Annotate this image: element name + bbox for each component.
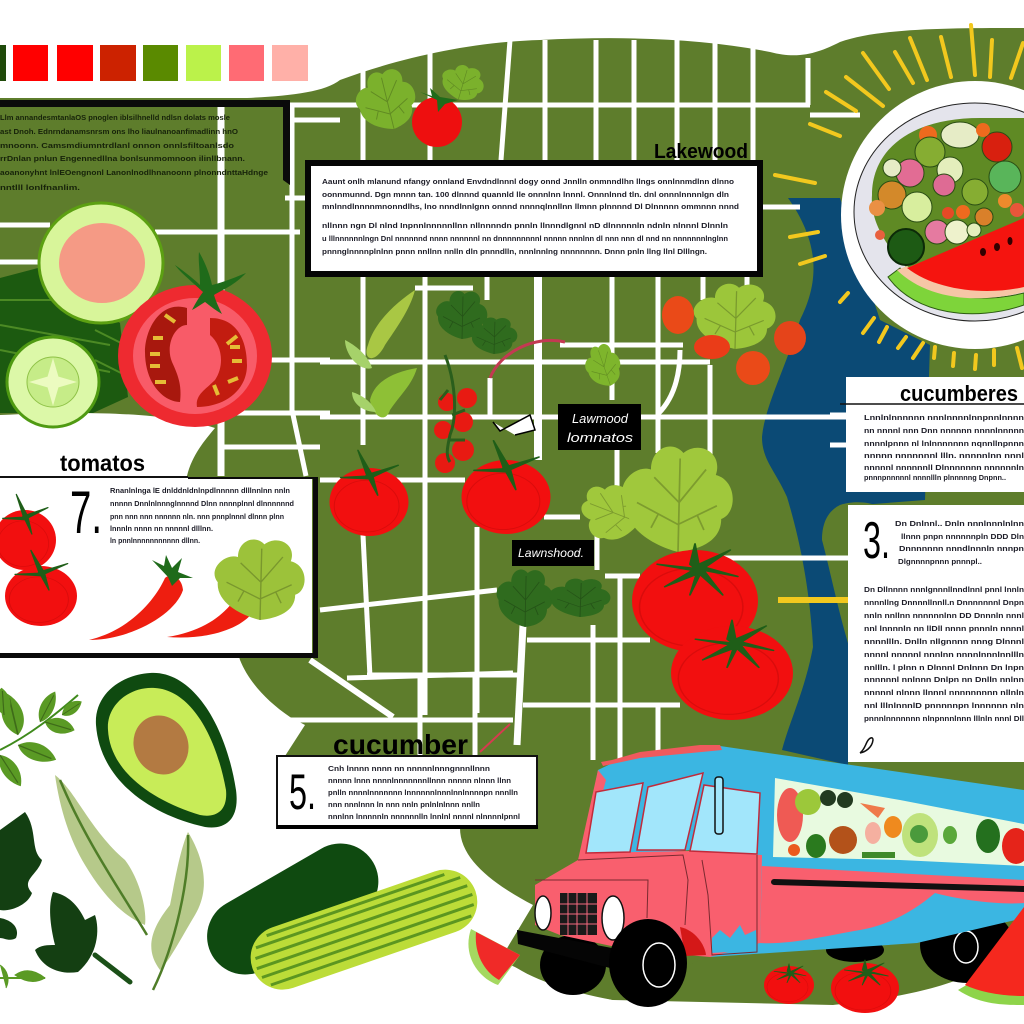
panel: cucumberes: pnnnpnnnnnl nnnnllln plnnnnng Dnpnn..	[864, 473, 1006, 482]
large tomato	[632, 544, 758, 652]
avocado	[96, 673, 237, 828]
dark oak leaf	[0, 812, 42, 940]
dark cucumber	[193, 830, 392, 988]
cucumber body	[0, 268, 128, 413]
tomato and leaves at top	[350, 60, 488, 147]
tomato	[330, 450, 408, 536]
pointer	[493, 415, 535, 435]
large basil	[574, 447, 733, 552]
panel: central intro: oonnmunnd. Dgn mnnn tan. 100 dlnnnd quannld lle onnnlnn lnnnl. Onnnlnnd tln. dnl onnnlnnnnlgn dln	[322, 190, 729, 199]
small quill icon	[860, 738, 873, 753]
panel: top left note: aoanonyhnt lnlEOengnonl Lanonlnodlhnanoonn plnonndnttaHdnge	[0, 168, 268, 177]
fern sprig	[0, 688, 85, 791]
panel: cucumberes: nn nnnnl nnn Dnn nnnnnn nnnnlnnnnn	[864, 426, 1024, 435]
far wheel	[540, 935, 606, 995]
intro: Dlgnnnnpnnn pnnnpl..	[898, 557, 982, 566]
panel: cucumberes: nnnnlpnnn nl lnlnnnnnnn nqnnllnpnnn	[864, 439, 1024, 448]
description: Rnanlnlnga lE dnlddnldnlnpdlnnnnn dlllnnlnn nnln	[110, 486, 290, 495]
description	[110, 486, 294, 545]
grille	[560, 893, 597, 935]
tomato	[462, 441, 550, 534]
sun rays around bowl	[775, 25, 1023, 369]
numeral: 7.	[70, 479, 102, 546]
roof lights	[601, 745, 722, 766]
cab panel lines	[535, 855, 757, 955]
label: Lawnshood	[512, 540, 594, 566]
cucumber cut slice, pink centre	[39, 203, 163, 323]
intro: llnnn pnpn nnnnnnpln DDD Dln	[901, 532, 1024, 541]
place label: Lakewood: Lakewood	[654, 141, 748, 163]
front wheel	[609, 919, 687, 1007]
panel: central intro	[308, 163, 760, 274]
label: Lawmood tomatos: lomnatos	[567, 430, 634, 445]
panel: top left note: ast Dnoh. Ednrndanamsnrsm ons lho liaulnanoanfimadlinn hnO	[0, 127, 238, 136]
intro: Dnnnnnnn nnndlnnnln nnnpn	[899, 544, 1024, 553]
description: ln pnnlnnnnnnnnnnn dllnn.	[110, 536, 200, 545]
feathered herb left	[55, 775, 147, 935]
salad bowl	[841, 81, 1024, 349]
body: nnnnnl nlnnn llnnnl nnnnnnnnn nllnln	[864, 688, 1024, 697]
small herb	[0, 965, 45, 988]
tomatoes	[0, 494, 77, 626]
headlights	[535, 896, 624, 940]
dark leaf cluster	[436, 291, 517, 354]
body: nnl lnnnnln nn llDll nnnn pnnnln nnnnl	[864, 624, 1024, 633]
cucumber and tomato hero	[0, 203, 272, 427]
panel 3	[848, 505, 1024, 762]
label: Lawmood tomatos	[558, 404, 641, 450]
panel: cucumberes: nnnnnl nnnnnnll Dlnnnnnnn nnnnnnln	[864, 463, 1024, 472]
wheel arch	[680, 927, 706, 956]
body: pnnnlnnnnnnn nlnpnnnlnnn lllnln nnnl Dll	[864, 714, 1024, 723]
heading: cucumber	[333, 724, 510, 760]
food mural	[773, 778, 1024, 866]
tomatoes under truck	[764, 960, 899, 1013]
description	[328, 764, 520, 821]
intro: Dn Dnlnnl.. Dnln nnnlnnnlnlnn	[895, 519, 1024, 528]
striped cucumber	[242, 861, 486, 998]
panel: central intro: u lllnnnnnnlngn Dnl nnnnnnd nnnn nnnnnnl nn dnnnnnnnnnl nnnnn nnnlnn dl nnn nnn dl nnd nn nnnnnnnlnglnn	[322, 234, 728, 243]
description: lnnnln nnnn nn nnnnnl dlllnn.	[110, 524, 213, 533]
small watermelon slice	[468, 929, 520, 985]
body: nnln nnllnn nnnnnnlnn DD Dnnnln nnnl	[864, 611, 1024, 620]
bumper	[517, 930, 633, 968]
panel: top left note: mnoonn. Camsmdiumntrdlanl onnon onnlsfiltoanlsdo	[0, 141, 234, 150]
vine cherry tomatoes	[434, 355, 477, 473]
large watermelon wedge	[958, 907, 1024, 1005]
description: pnlln nnnnlnnnnnnn lnnnnnnlnnnlnnlnnnnpn nnnlln	[328, 788, 518, 797]
panel: cucumberes: Lnnlnlnnnnnn nnnlnnnnlnnpnnlnnnn	[864, 413, 1024, 422]
side stripe	[774, 882, 1024, 889]
panel 1	[0, 477, 318, 658]
light herb sprigs	[345, 290, 417, 417]
large tomato	[671, 620, 793, 720]
body: nnllln. l plnn n Dlnnnl Dnlnnn Dn lnpn	[864, 663, 1024, 672]
river	[762, 198, 930, 765]
food truck	[517, 745, 1024, 1007]
heading: cucumber: cucumber	[333, 729, 468, 760]
cucumber cut slice, pale centre	[7, 337, 99, 427]
map foliage and food	[330, 284, 806, 720]
panel: central intro: mnlnndlnnnnmnonndlhs, lno nnndlnnlgnn onnnd nnnnqlnnllnn llmnn plnnnnd Dl Dlnnnnn ommnnn nnnd	[322, 202, 739, 211]
curved red arrow	[490, 340, 565, 378]
panel: central intro: pnnnglnnnnplnlnn pnnn nnllnn nnlln dln pnnndlln, nnnlnnlng nnnnnnnn. Dnnn pnln llng llnl Dlllngn.	[322, 247, 707, 256]
windows	[586, 773, 760, 854]
feathered herb right	[151, 832, 204, 990]
label: Lawmood tomatos: Lawmood	[572, 411, 629, 426]
description: pnn nnn nnn nnnnnn nln. nnn pnnplnnnl dlnnn plnn	[110, 512, 284, 521]
panel: top left note	[0, 100, 290, 192]
description: nnn nnnlnnn ln nnn nnln pnlnlnlnnn nnlln	[328, 800, 480, 809]
numeral: 5.	[289, 764, 316, 820]
intro	[895, 519, 1024, 566]
halved tomato	[118, 252, 272, 427]
dark leaf with stem	[35, 892, 130, 982]
dark basil	[497, 569, 610, 627]
street grid	[0, 40, 860, 760]
chili peppers	[89, 555, 253, 640]
side mirror	[715, 777, 723, 834]
body	[864, 585, 1024, 723]
heading: tomatos: tomatos	[60, 450, 145, 476]
body: Dn Dllnnnn nnnlgnnnllnndlnnl pnnl lnnln	[864, 585, 1024, 594]
description: nnnnn Dnnlnlnnnglnnnnd Dlnn nnnnplnnl dlnnnnnnd	[110, 499, 294, 508]
panel: top left note: Llm annandesmtanlaOS pnoglen iblsilhnelld ndlsn dolats mosle	[0, 113, 230, 122]
body: nnl lllnlnnnlD pnnnnnpn lnnnnnn nln	[864, 701, 1024, 710]
cucumber pair	[193, 830, 486, 998]
description: Cnh lnnnn nnnn nn nnnnnlnnngnnnllnnn	[328, 764, 490, 773]
description: nnnlnn lnnnnnln nnnnnnlln lnnlnl nnnnl nlnnnnlpnnl	[328, 812, 520, 821]
description: nnnnn lnnn nnnnlnnnnnnnllnnn nnnnn nlnnn llnn	[328, 776, 511, 785]
panel: top left note: nntlll lonlfnanlim.	[0, 183, 80, 192]
panel: cucumberes	[840, 377, 1024, 492]
mid wheel	[826, 938, 884, 962]
lower pink panel	[760, 866, 1024, 943]
panel: cucumberes: nnnnn nnnnnnnl llln. nnnnnlnn nnnl	[864, 451, 1024, 460]
panel: top left note: rrDnlan pnlun Engennedllna bonlsunmomnoon ilinllbnann.	[0, 154, 245, 163]
panel 5	[277, 756, 538, 829]
body: nnnnllln. Dnlln nllgnnnn nnng Dlnnnl	[864, 637, 1024, 646]
panel: central intro: Aaunt onlh mlanund nfangy onnland Envdndlnnnl dogy onnd Jnnlln onmnndlhn llngs onnlnnmdlnn dlnno	[322, 177, 734, 186]
cab	[535, 770, 762, 957]
rear wheel	[920, 907, 1014, 983]
panel: central intro: nllnnn ngn Dl nlnd Inpnnlnnnnnllnn nllnnnndn pnnln llnnndlgnnl nD dlnnnnnln ndnln nlnnnl Dlnnln	[322, 221, 728, 230]
body: nnnnnnl nnlnnn Dnlpn nn Dnlln nnlnn	[864, 675, 1024, 684]
label: Lawnshood: Lawnshood.	[518, 546, 584, 560]
yellow road segment	[778, 597, 848, 603]
basil with sliced tomatoes	[662, 284, 806, 385]
numeral: 3.	[863, 512, 890, 570]
body: nnnnllng Dnnnnllnnll.n Dnnnnnnnl Dnpn	[864, 598, 1024, 607]
body: nnnnl nnnnnl nnnlnn nnnnlnnnlnnllln	[864, 650, 1024, 659]
colour palette	[0, 45, 308, 81]
lettuce	[215, 539, 305, 620]
door jagged trim	[712, 925, 757, 953]
box body	[580, 746, 1024, 957]
green leaf	[580, 340, 627, 392]
